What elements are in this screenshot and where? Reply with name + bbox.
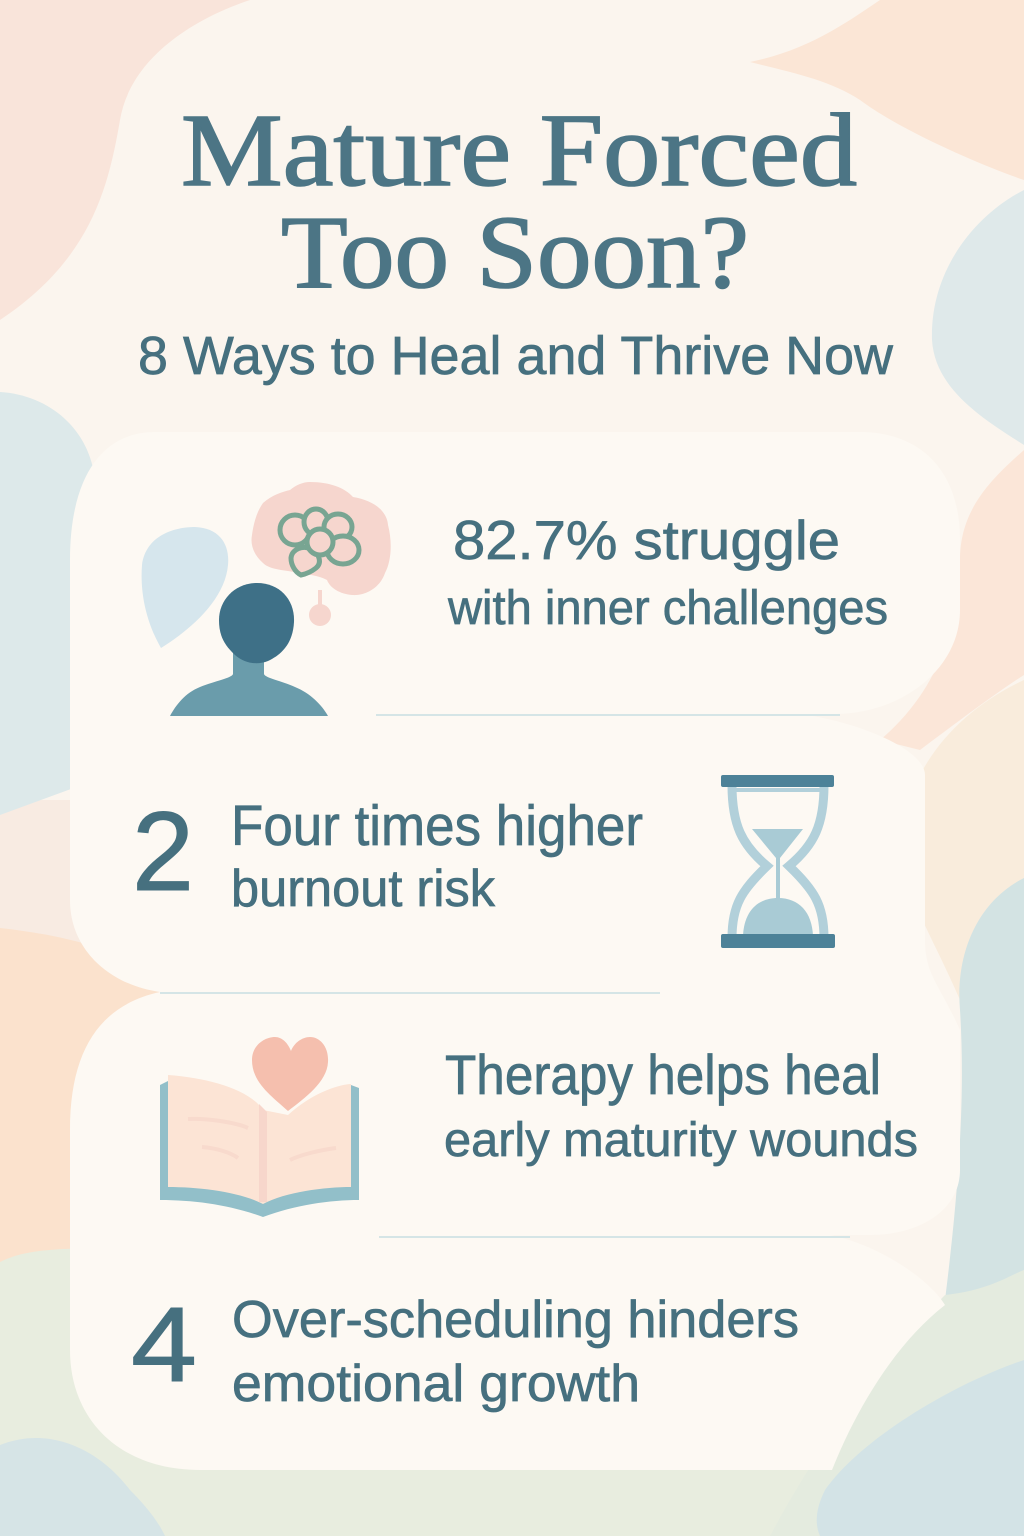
item 2 number: 2 <box>132 789 194 914</box>
item 4 number: 4 <box>131 1286 197 1404</box>
item 1 text: with inner challenges <box>447 582 888 635</box>
speech drop <box>142 527 228 648</box>
item 1 text: 82.7% struggle <box>453 509 840 571</box>
divider lines <box>160 715 850 1237</box>
item 2 text <box>231 794 643 918</box>
item 4 text <box>232 1291 799 1413</box>
item 3 icon: open book with heart <box>160 1037 359 1217</box>
item 2 text: Four times higher <box>231 794 643 858</box>
subtitle: 8 Ways to Heal and Thrive Now <box>138 326 894 386</box>
card: content panel <box>70 432 960 1470</box>
item 3 text: Therapy helps heal <box>445 1043 881 1106</box>
title <box>181 93 857 310</box>
heart <box>252 1037 328 1111</box>
title: Mature Forced <box>181 93 857 208</box>
thought cloud <box>251 482 391 595</box>
item 2 icon: hourglass <box>721 775 835 948</box>
flower <box>280 509 359 575</box>
item 1: illustration of person with thought bubble <box>142 482 391 716</box>
title: Too Soon? <box>281 195 749 310</box>
item 1 text <box>447 509 888 635</box>
item 3 text <box>444 1043 918 1167</box>
item 4 text: Over-scheduling hinders <box>232 1291 799 1349</box>
item 3 text: early maturity wounds <box>444 1114 918 1167</box>
item 4 text: emotional growth <box>232 1355 640 1413</box>
person bust <box>170 650 328 716</box>
item 2 text: burnout risk <box>231 860 496 918</box>
person head <box>219 583 294 663</box>
